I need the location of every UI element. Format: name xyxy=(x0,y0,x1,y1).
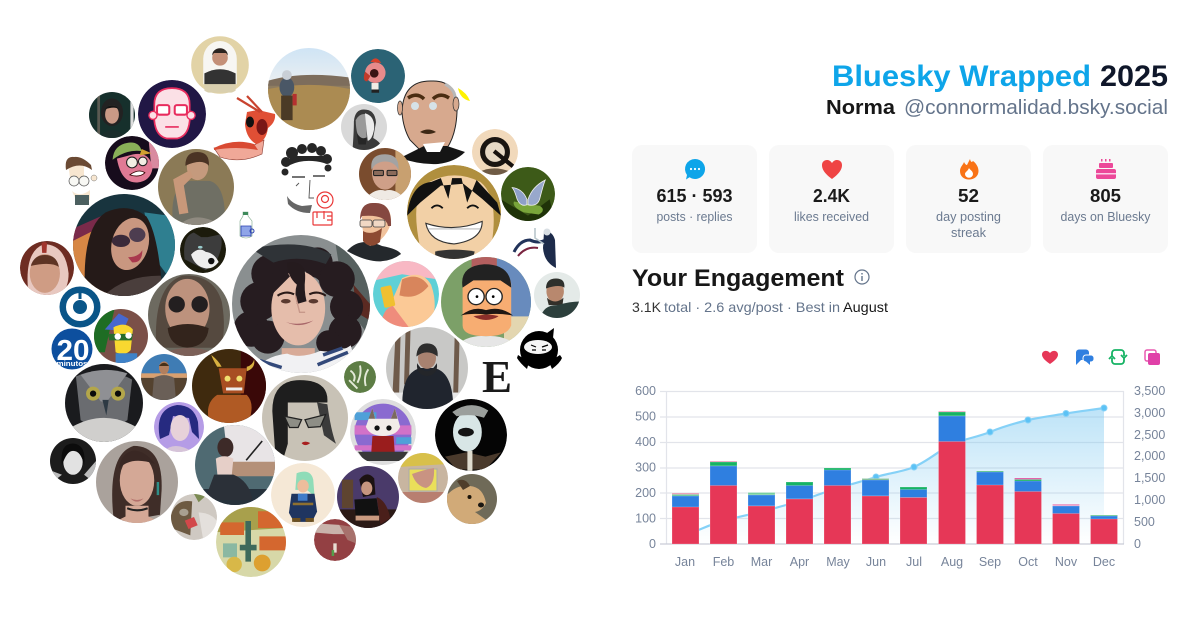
avatar: green hat cartoon xyxy=(105,136,159,190)
avatar: child with pink hood xyxy=(20,241,74,295)
panel: days on Bluesky: 805 xyxy=(1090,186,1121,206)
engagement summary: total · 2.6 avg/post · Best in xyxy=(664,299,840,315)
panel: posts and replies xyxy=(632,145,757,253)
panel: posting streak: streak xyxy=(951,226,987,240)
avatar: sunglasses woman xyxy=(73,194,175,296)
icon: legend reposts xyxy=(1109,350,1127,364)
panel: likes received: 2.4K xyxy=(813,186,850,206)
right axis labels: 2,000 xyxy=(1134,449,1165,463)
avatar: red rose in fist xyxy=(313,192,333,225)
avatar: mountain biker xyxy=(268,48,350,130)
avatar: Q logo xyxy=(472,129,518,175)
area and cumulative line xyxy=(685,405,1107,544)
avatar: black and white woman xyxy=(50,438,96,484)
avatar: grey-haired man with glasses xyxy=(359,148,411,200)
bar: Dec xyxy=(1090,515,1118,544)
avatar: artichoke xyxy=(344,361,376,393)
month labels: May xyxy=(826,555,851,569)
panel: posts and replies: posts · replies xyxy=(656,210,732,224)
bar: Jan xyxy=(672,493,699,544)
panel: likes received: likes received xyxy=(794,210,869,224)
avatar: main portrait curly hair xyxy=(232,235,370,373)
avatar cluster xyxy=(20,35,580,577)
month labels: Dec xyxy=(1093,555,1115,569)
chart legend xyxy=(1042,350,1160,365)
left axis labels: 300 xyxy=(635,460,656,474)
bar: Mar xyxy=(748,492,775,544)
bar: Sep xyxy=(976,471,1004,544)
avatar: woman in nike top xyxy=(337,466,399,528)
avatar: dark hair woman xyxy=(89,92,135,138)
right axis labels: 3,500 xyxy=(1134,384,1165,398)
avatar: purple-haired elf xyxy=(154,402,204,452)
avatar: yellow leaf xyxy=(458,88,470,101)
avatar: cat on glitch background xyxy=(350,399,416,465)
right axis labels: 2,500 xyxy=(1134,428,1165,442)
avatar: turtle with flower xyxy=(171,494,217,540)
avatar: blue ring logo xyxy=(60,286,100,328)
avatar: bald glasses illustration xyxy=(138,80,206,148)
month labels: Mar xyxy=(751,555,772,569)
left axis labels: 500 xyxy=(635,410,656,424)
avatar: ninja xyxy=(517,328,562,369)
avatar: man in green shirt xyxy=(534,272,580,318)
bar: Jul xyxy=(900,487,927,544)
avatar: owl xyxy=(65,364,143,442)
avatar: skeleton figure xyxy=(435,399,507,471)
avatar: bearded man with round sunglasses xyxy=(148,274,230,356)
right axis labels: 0 xyxy=(1134,537,1141,551)
chart: monthly engagement xyxy=(635,384,1165,569)
icon: chat bubble xyxy=(685,159,705,180)
left axis labels: 200 xyxy=(635,486,656,500)
bar: Feb xyxy=(710,461,737,544)
panel: likes received xyxy=(769,145,894,253)
avatar: blue butterfly xyxy=(501,167,555,221)
month labels xyxy=(675,555,1115,569)
avatar: sketched bearded man xyxy=(281,143,332,213)
panel: posting streak: 52 xyxy=(958,186,979,206)
engagement summary: August xyxy=(843,299,888,315)
panel: posting streak xyxy=(906,145,1031,253)
icon: legend quotes xyxy=(1145,350,1160,365)
month labels: Sep xyxy=(979,555,1001,569)
left axis labels: 400 xyxy=(635,435,656,449)
icon: heart xyxy=(822,160,842,179)
avatar: woman in room by window xyxy=(195,425,275,505)
month labels: Oct xyxy=(1018,555,1038,569)
icon: legend replies xyxy=(1076,350,1094,365)
bar: May xyxy=(824,468,851,544)
avatar: man sitting on grass xyxy=(158,149,234,225)
avatar: comic collage xyxy=(216,507,286,577)
heading: Your Engagement: Your Engagement xyxy=(632,265,844,292)
month labels: Apr xyxy=(790,555,809,569)
right axis labels: 1,500 xyxy=(1134,471,1165,485)
avatar: bearded man with cap xyxy=(347,203,401,261)
right axis labels: 3,000 xyxy=(1134,406,1165,420)
bar: Nov xyxy=(1052,504,1080,544)
avatar: Marceline xyxy=(514,228,556,268)
stacked bars xyxy=(672,411,1118,544)
avatar: 20 minutos logo: minutos xyxy=(56,359,88,368)
avatar: caterpillar monster xyxy=(214,96,275,160)
avatar: 20 minutos logo: 20 xyxy=(56,335,90,367)
avatar: man in snowy forest xyxy=(386,327,468,409)
user name and handle: @connormalidad.bsky.social xyxy=(904,97,1168,119)
title: Bluesky Wrapped xyxy=(832,60,1091,93)
right axis labels: 500 xyxy=(1134,515,1155,529)
month labels: Jun xyxy=(866,555,886,569)
bar: Jun xyxy=(862,478,889,544)
avatar: Milhouse cartoon xyxy=(94,309,148,363)
left axis labels xyxy=(635,384,656,551)
avatar: medal portrait xyxy=(190,35,250,95)
bar: Apr xyxy=(786,482,813,544)
icon: info xyxy=(855,270,869,284)
panel: days on Bluesky: days on Bluesky xyxy=(1060,210,1151,224)
avatar: otter with phone xyxy=(373,261,439,327)
avatar: devil robot xyxy=(192,349,266,423)
bar: Aug xyxy=(938,411,966,544)
engagement summary xyxy=(632,299,888,315)
left axis labels: 600 xyxy=(635,384,656,398)
panel: posts and replies: 615 · 593 xyxy=(656,186,732,206)
month labels: Nov xyxy=(1055,555,1078,569)
icon: flame xyxy=(960,159,978,180)
month labels: Aug xyxy=(941,555,963,569)
icon: legend heart xyxy=(1042,351,1058,364)
right axis labels xyxy=(1134,384,1165,551)
month labels: Jul xyxy=(906,555,922,569)
avatar: Bob Belcher xyxy=(441,257,533,347)
user name and handle: Norma xyxy=(826,97,896,119)
month labels: Jan xyxy=(675,555,695,569)
avatar: small bottle xyxy=(240,212,254,238)
avatar: grey man with hand xyxy=(341,104,387,150)
left axis labels: 100 xyxy=(635,512,656,526)
right axis labels: 1,000 xyxy=(1134,493,1165,507)
title: 2025 xyxy=(1100,60,1168,93)
panel: posting streak: day posting xyxy=(936,210,1001,224)
avatar: dog xyxy=(447,474,497,524)
avatar: ink drawing of woman xyxy=(262,375,348,461)
avatar: letter E logo xyxy=(472,352,522,402)
avatar: woman with choker xyxy=(96,441,178,523)
avatar: man on rooftop at dusk xyxy=(141,354,187,400)
avatar: 20 minutos logo xyxy=(52,328,92,370)
avatar: pig painting xyxy=(398,453,448,503)
avatar: pixel character xyxy=(271,463,335,527)
bar: Oct xyxy=(1014,478,1042,544)
panel: days on Bluesky xyxy=(1043,145,1168,253)
month labels: Feb xyxy=(713,555,734,569)
avatar: pixel girl on teal xyxy=(351,49,405,103)
avatar: red wall figure xyxy=(314,519,356,561)
avatar: old man cartoon xyxy=(398,81,465,164)
avatar: nerd cartoon xyxy=(66,157,97,205)
avatar: letter E logo: E xyxy=(482,352,512,402)
avatar: Luffy xyxy=(407,165,501,259)
avatar: husky xyxy=(180,227,226,273)
engagement summary: 3.1K xyxy=(632,299,662,315)
icon: cake xyxy=(1096,159,1116,179)
left axis labels: 0 xyxy=(649,537,656,551)
